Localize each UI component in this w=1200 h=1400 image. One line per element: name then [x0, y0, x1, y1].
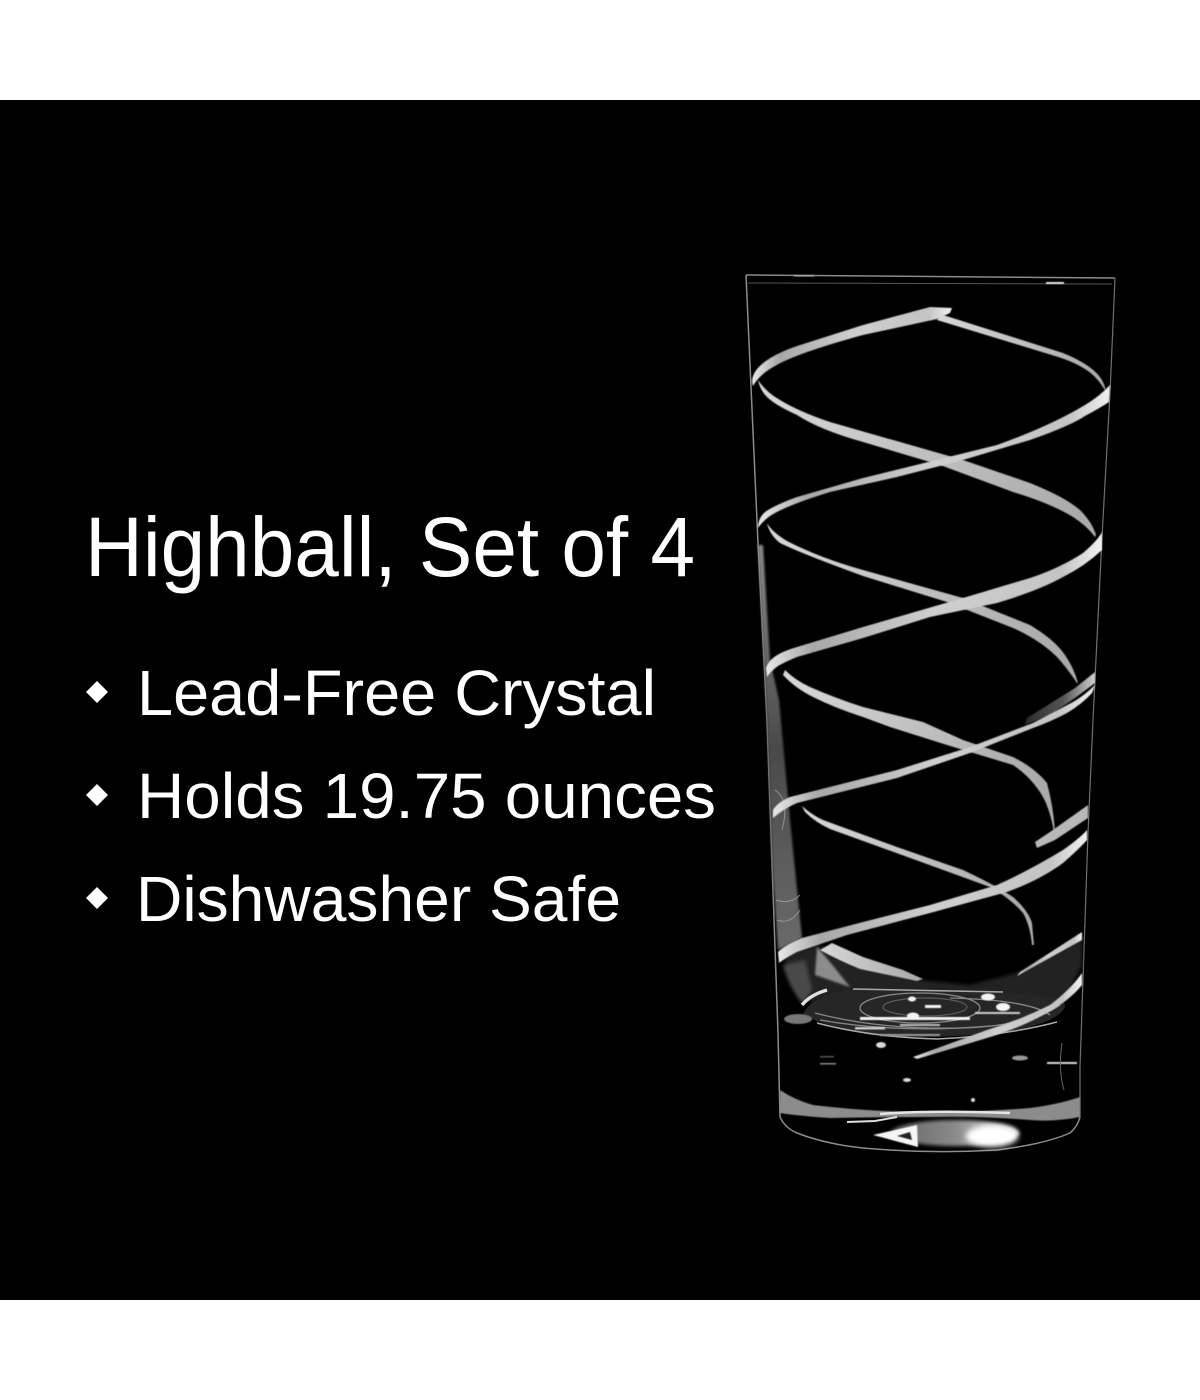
feature list — [86, 657, 716, 935]
glass outline — [746, 275, 1115, 1152]
base funnel and bowl — [783, 935, 1082, 1039]
back ribbons — [758, 314, 1106, 981]
faint upper right ribbon — [1025, 672, 1095, 725]
bullet: lead-free crystal: Lead-Free Crystal — [137, 657, 656, 729]
title: Highball, Set of 4 — [85, 500, 695, 594]
rim highlights — [794, 275, 1064, 284]
heavy glass base — [780, 1042, 1080, 1147]
bullet: holds 19.75 ounces: Holds 19.75 ounces — [137, 760, 716, 832]
bullet: dishwasher safe: Dishwasher Safe — [136, 863, 621, 935]
highball glass illustration — [746, 275, 1115, 1152]
refracted left wall — [758, 545, 802, 950]
front ribbons — [752, 307, 1110, 1059]
